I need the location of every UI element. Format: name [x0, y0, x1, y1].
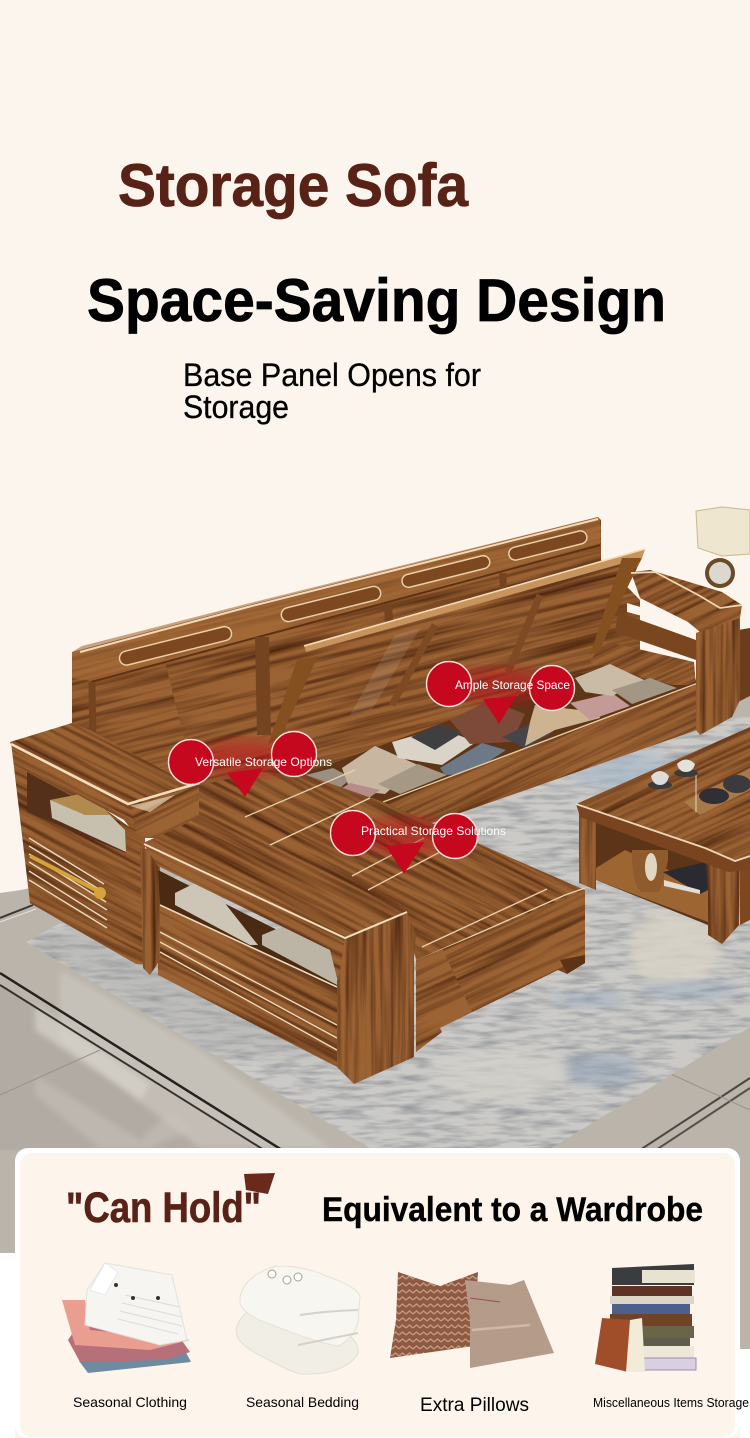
rug: [26, 715, 750, 1148]
red badge: ample storage space: Ample Storage Space: [455, 678, 570, 692]
chaise storage unit: [140, 848, 337, 1067]
right armrest: [631, 570, 742, 735]
label: seasonal bedding: Seasonal Bedding: [246, 1394, 359, 1410]
folded clothes in storage: [306, 664, 677, 803]
sofa: [10, 517, 742, 1084]
red badge: practical storage solutions: Practical Storage Solutions: [361, 824, 506, 838]
backrest: [72, 517, 640, 800]
storage interior: [268, 603, 698, 808]
subheading: Storage: [183, 389, 289, 425]
carved handles: [118, 530, 588, 667]
icon: pillows: [390, 1272, 554, 1368]
red badge: versatile storage options: Versatile Storage Options: [195, 755, 332, 769]
heading: space-saving design: Space-Saving Design: [87, 267, 666, 334]
storage front board: [383, 683, 698, 840]
red badge: ample storage space: [426, 662, 574, 724]
title: Storage Sofa: [118, 152, 469, 219]
left storage unit: [11, 742, 148, 965]
label: seasonal clothing: Seasonal Clothing: [73, 1394, 187, 1410]
label: miscellaneous items storage: Miscellaneous Items Storage: [593, 1396, 749, 1410]
icon: stack of books: [595, 1264, 696, 1372]
lid: [268, 549, 645, 745]
label: extra pillows: Extra Pillows: [420, 1395, 529, 1416]
left armrest: [10, 723, 199, 838]
icon: folded bedding: [236, 1266, 360, 1374]
red badge: practical storage solutions: [330, 810, 506, 874]
red badge: versatile storage options: [168, 732, 332, 797]
subheading: [183, 357, 481, 425]
panel: can hold card: [0, 1148, 750, 1438]
heading: can hold: "Can Hold": [66, 1184, 261, 1232]
chaise side panel: [416, 890, 585, 1052]
subheading: Base Panel Opens for: [183, 357, 481, 393]
chaise seat: [160, 770, 585, 960]
heading: equivalent to a wardrobe: Equivalent to a Wardrobe: [322, 1191, 703, 1229]
coffee table: [576, 727, 750, 944]
icon: folded clothing: [62, 1263, 191, 1373]
floor: [0, 690, 750, 1349]
far side cabinet: [738, 628, 750, 702]
icon: table lamp: [696, 507, 750, 588]
brush accent: [244, 1173, 275, 1194]
front armrest and leg: [143, 822, 416, 1084]
